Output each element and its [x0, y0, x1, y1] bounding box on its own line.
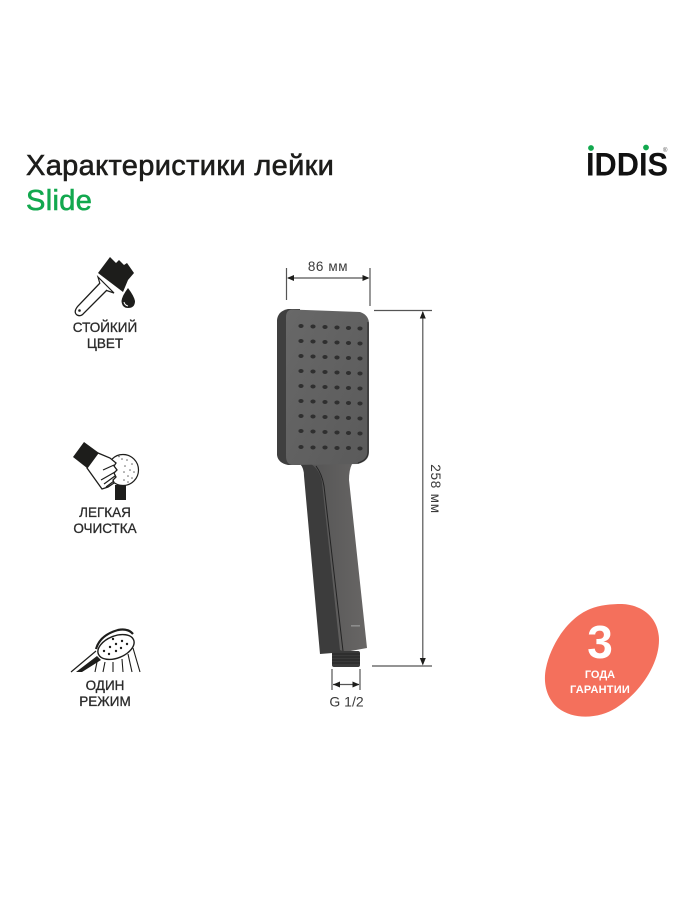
subtitle: Slide: Slide — [26, 185, 92, 217]
label: легкая очистка — [73, 505, 137, 536]
threaded connector — [332, 651, 360, 667]
title: Характеристики лейки — [26, 150, 334, 182]
dimension: height 258 mm — [372, 310, 443, 667]
logo: iddis: ® — [663, 147, 668, 154]
warranty badge: ГАРАНТИИ — [570, 684, 630, 696]
dimension: width 86 mm: 86 мм — [308, 259, 348, 274]
warranty badge: 3 — [587, 616, 613, 668]
shower handle face — [311, 464, 367, 652]
shower head face — [286, 310, 369, 465]
shower neck side — [300, 464, 345, 654]
icon: shower head with single spray mode — [70, 628, 140, 672]
label: легкая очистка: ЛЕГКАЯ — [79, 505, 131, 520]
label: стойкий цвет: СТОЙКИЙ — [73, 320, 137, 335]
dimension: thread G 1/2 — [329, 669, 364, 708]
shower head side — [277, 309, 300, 465]
label: стойкий цвет — [73, 319, 137, 352]
label: один режим: РЕЖИМ — [79, 694, 131, 709]
warranty badge — [544, 604, 659, 717]
warranty badge: ГОДА — [585, 669, 615, 681]
icon: hand cleaning shower head — [73, 442, 140, 500]
label: стойкий цвет: ЦВЕТ — [87, 336, 123, 351]
label: легкая очистка: ОЧИСТКА — [73, 521, 137, 536]
spray nozzles — [298, 324, 363, 450]
label: один режим: ОДИН — [86, 678, 124, 693]
product drawing: hand shower — [277, 309, 369, 667]
dimension: width 86 mm — [286, 259, 371, 306]
dimension: height 258 mm: 258 мм — [428, 464, 443, 514]
icon: paint brush with drop — [74, 257, 135, 316]
label: один режим — [79, 678, 131, 709]
